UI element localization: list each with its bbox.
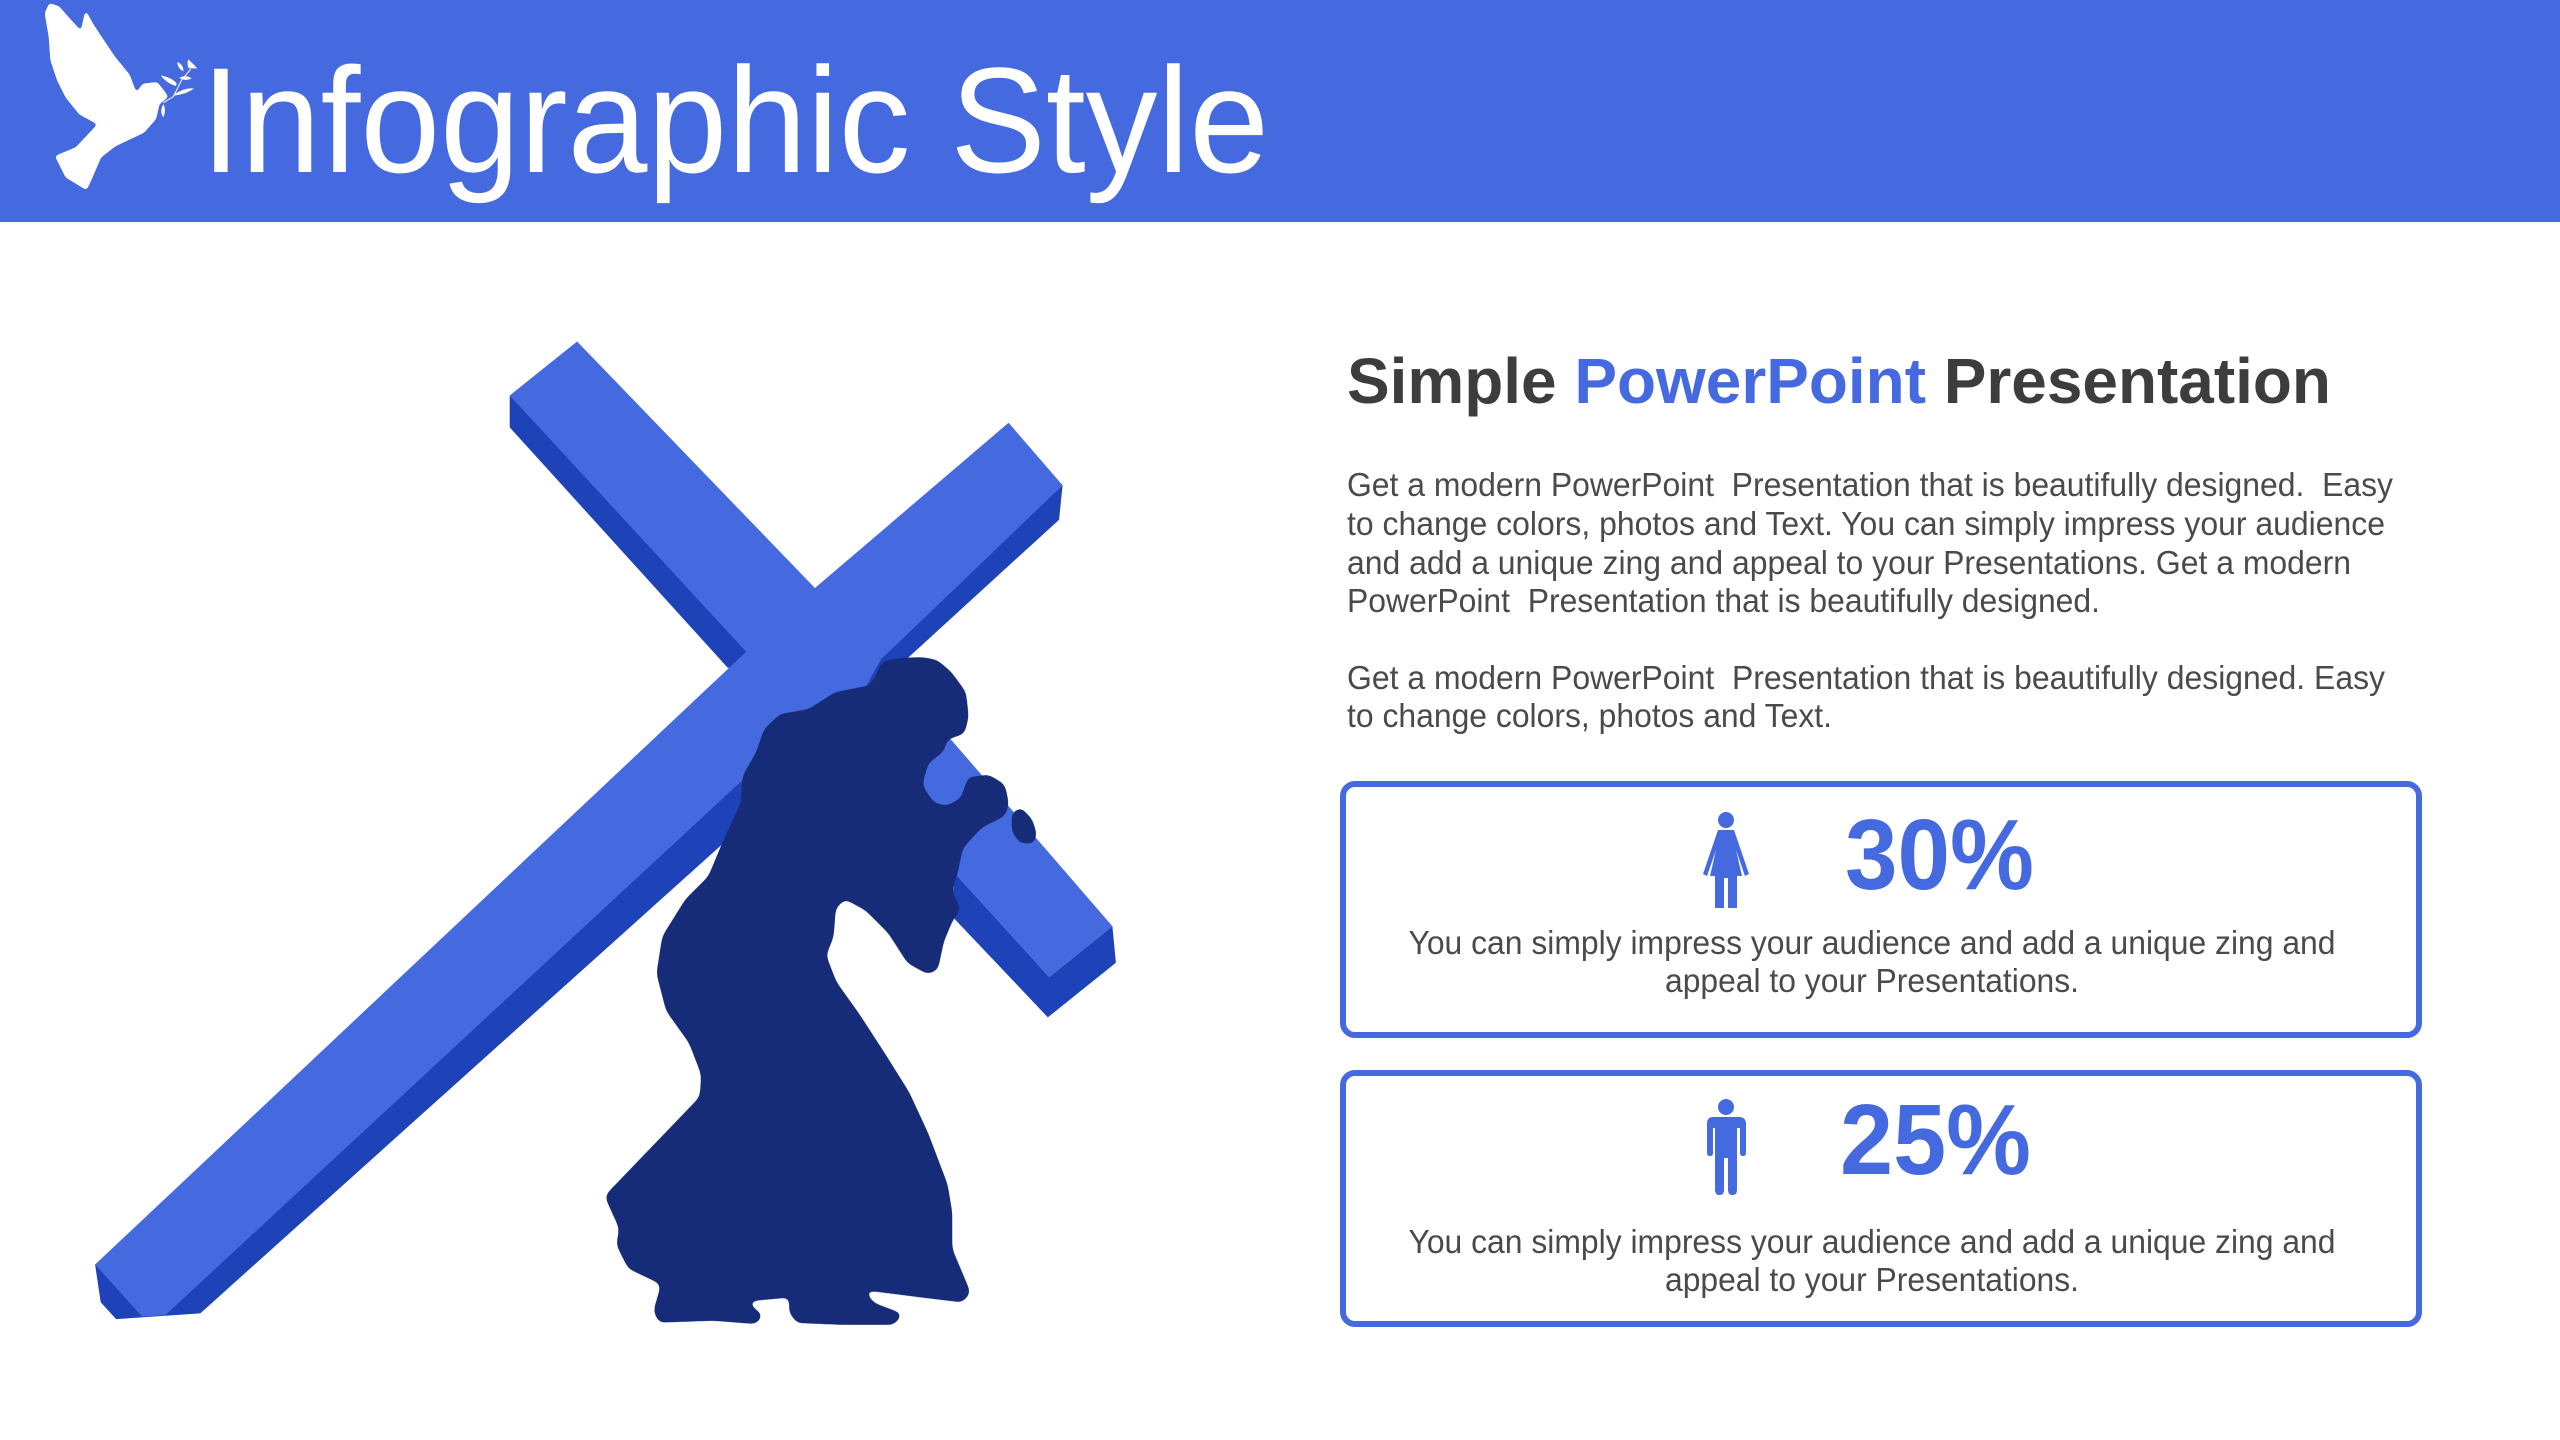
paragraph 1: Get a modern PowerPoint Presentation that is beautifully designed. Easy [1347,466,2393,503]
paragraph 1 [1347,466,2393,619]
panel: 25% stat: appeal to your Presentations. [1665,1261,2079,1298]
illustration: robed figure silhouette [606,659,1037,1323]
description: You can simply impress your audience and add a unique zing and [1408,924,2336,961]
paragraph 1: and add a unique zing and appeal to your Presentations. Get a modern [1347,544,2351,581]
stat: 25%: 25% [1840,1084,2031,1196]
paragraph 2: Get a modern PowerPoint Presentation that is beautifully designed. Easy [1347,659,2385,696]
illustration: cross [95,341,1116,1319]
panel: 30% stat: appeal to your Presentations. [1665,962,2079,999]
header band [0,0,2560,222]
icon: white dove with olive branch [46,5,197,188]
panel: 25% stat [1343,1073,2419,1324]
paragraph 2 [1347,659,2385,734]
panel: 30% stat [1343,784,2419,1035]
title: Infographic Style [201,36,1269,204]
paragraph 1: to change colors, photos and Text. You can simply impress your audience [1347,505,2385,542]
heading: Simple PowerPoint Presentation [1347,345,2331,417]
cross lit faces [95,341,1112,1317]
description: You can simply impress your audience and add a unique zing and [1408,1223,2336,1260]
stat: 30%: 30% [1845,799,2034,911]
cross shaded sides [95,395,1116,1319]
paragraph 1: PowerPoint Presentation that is beautifully designed. [1347,582,2100,619]
paragraph 2: to change colors, photos and Text. [1347,697,1832,734]
icon: man [1707,1099,1746,1195]
icon: woman [1703,812,1749,908]
